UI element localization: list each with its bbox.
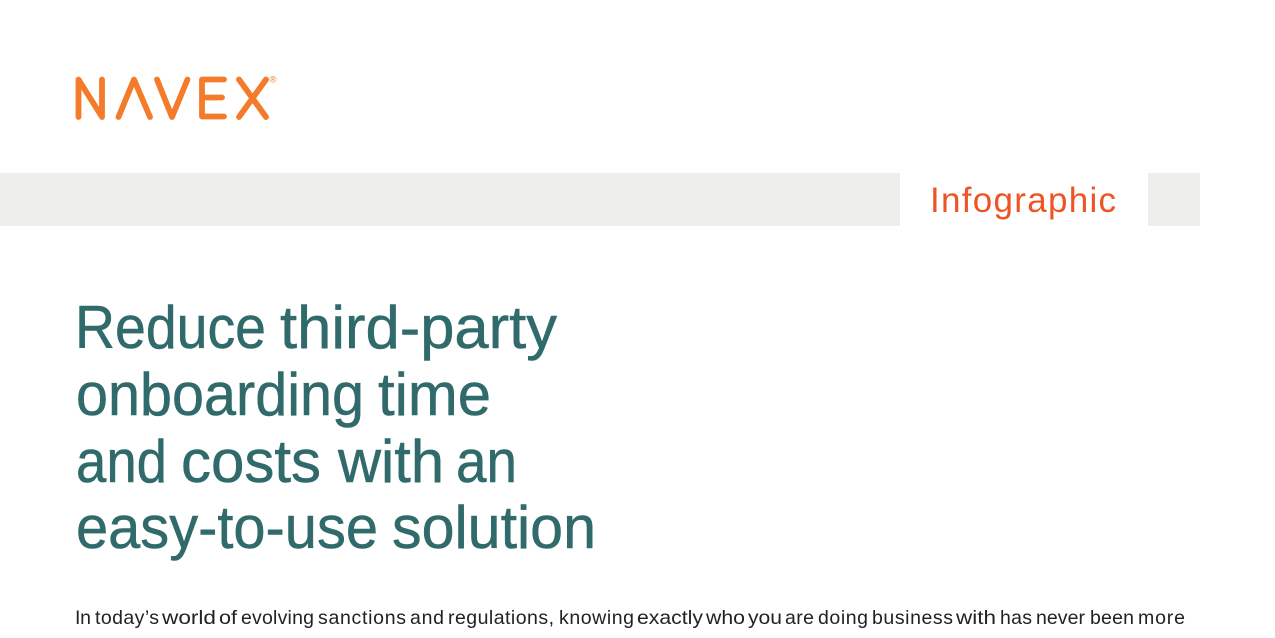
title: Reduce bbox=[75, 294, 266, 361]
intro text: business bbox=[872, 607, 953, 629]
intro text: who bbox=[705, 607, 745, 629]
intro text bbox=[75, 607, 1185, 629]
intro text: doing bbox=[818, 607, 868, 629]
title: easy-to-use bbox=[76, 494, 378, 561]
intro text: are bbox=[785, 607, 814, 629]
title: time bbox=[378, 361, 491, 428]
intro text: regulations, bbox=[448, 607, 554, 629]
title: an bbox=[456, 428, 517, 495]
intro text: today’s bbox=[95, 607, 159, 629]
intro text: been bbox=[1090, 607, 1134, 629]
intro text: world bbox=[161, 607, 216, 629]
intro text: exactly bbox=[637, 607, 703, 629]
intro text: and bbox=[410, 607, 444, 629]
intro text: more bbox=[1138, 607, 1185, 629]
intro text: In bbox=[75, 607, 91, 629]
title bbox=[75, 294, 596, 561]
title: third-party bbox=[280, 294, 557, 361]
title: solution bbox=[392, 494, 596, 561]
label: Infographic: Infographic bbox=[930, 181, 1116, 220]
title: costs bbox=[181, 428, 321, 495]
intro text: knowing bbox=[559, 607, 634, 629]
intro text: you bbox=[748, 607, 782, 629]
title: and bbox=[76, 428, 167, 495]
logo: NAVEX bbox=[78, 74, 276, 117]
logo: NAVEX: ® bbox=[270, 74, 276, 86]
intro text: of bbox=[219, 607, 238, 629]
intro text: sanctions bbox=[318, 607, 406, 629]
title: with bbox=[337, 428, 444, 495]
intro text: with bbox=[955, 607, 996, 629]
header band right bbox=[1148, 173, 1200, 226]
header band left bbox=[0, 173, 900, 226]
title: onboarding bbox=[76, 361, 364, 428]
intro text: has bbox=[1000, 607, 1032, 629]
intro text: evolving bbox=[241, 607, 314, 629]
intro text: never bbox=[1036, 607, 1086, 629]
